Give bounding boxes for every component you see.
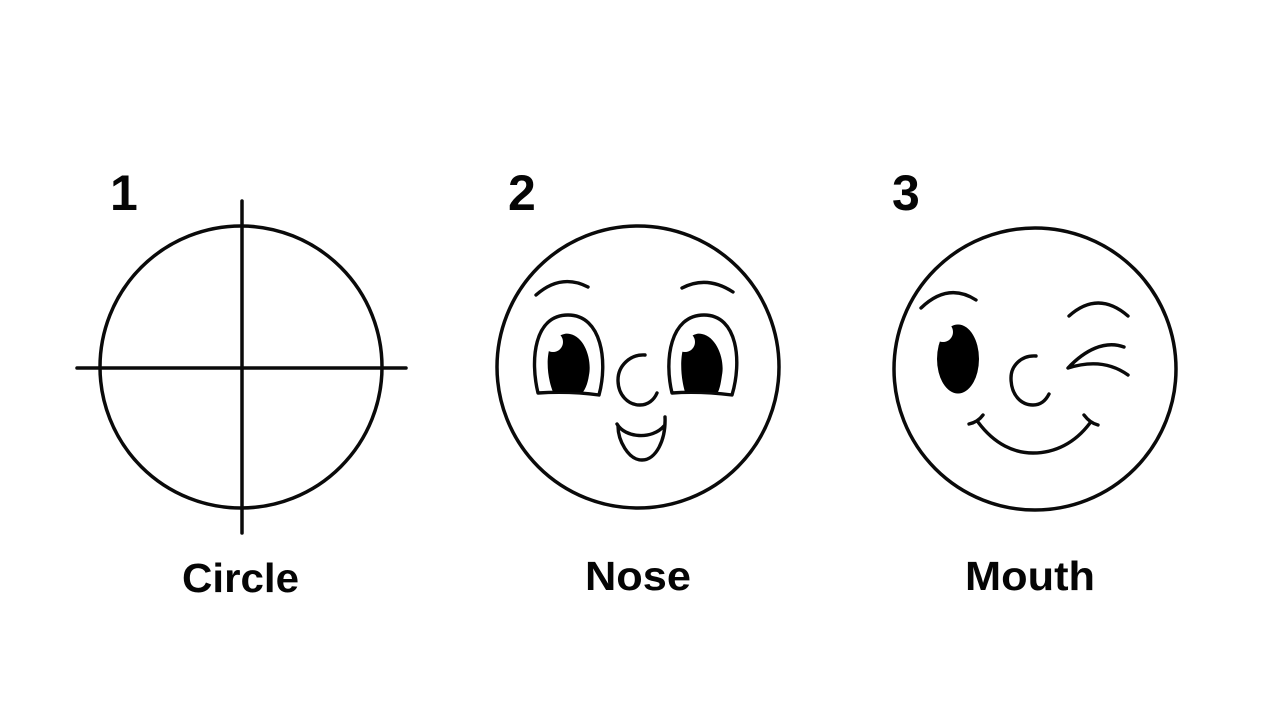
open eye <box>933 322 979 394</box>
label: Circle: Circle <box>182 555 299 601</box>
label: Mouth: Mouth <box>965 553 1095 599</box>
step number 1: 1 <box>110 165 138 221</box>
left eyebrow <box>921 293 976 308</box>
panel: step 1 circle <box>77 165 406 601</box>
label: Nose: Nose <box>585 553 691 599</box>
face outline <box>894 228 1176 510</box>
right eye <box>669 315 737 395</box>
left eyebrow <box>536 282 588 295</box>
winking eye <box>1068 345 1128 375</box>
panel: step 2 nose <box>497 165 779 599</box>
right eyebrow <box>682 282 733 292</box>
left eye <box>534 315 603 395</box>
step number 2: 2 <box>508 165 536 221</box>
horizontal guide line <box>77 366 406 370</box>
open mouth <box>617 417 665 460</box>
construction circle <box>100 226 382 508</box>
nose <box>1011 356 1049 405</box>
step number 3: 3 <box>892 165 920 221</box>
panel: step 3 mouth <box>892 165 1176 599</box>
nose <box>618 355 657 405</box>
smile <box>969 415 1098 453</box>
vertical guide line <box>240 201 244 533</box>
right eyebrow <box>1069 303 1128 316</box>
face outline <box>497 226 779 508</box>
